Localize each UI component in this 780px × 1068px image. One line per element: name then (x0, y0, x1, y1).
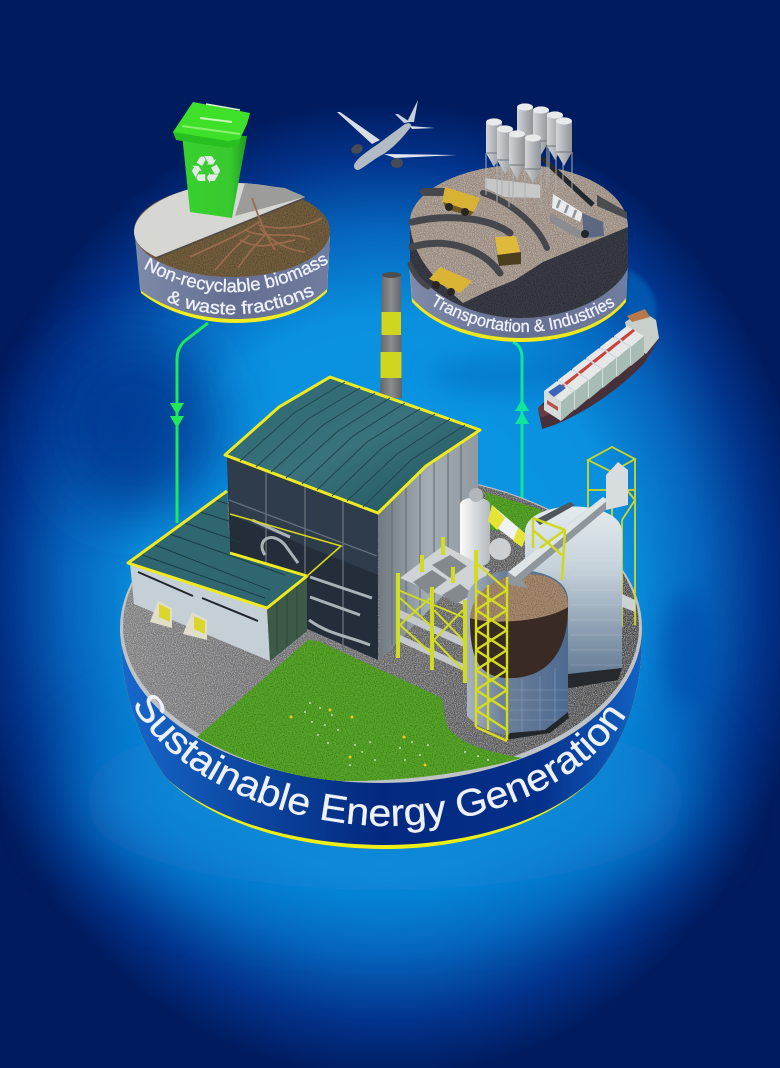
front tower scaffold (476, 550, 507, 741)
main roof (225, 377, 480, 513)
disc top rim (120, 473, 642, 783)
band glow (121, 640, 642, 849)
low building front wall (130, 563, 270, 661)
deck platforms (400, 545, 490, 606)
white stack tank (460, 498, 490, 567)
building right wall (378, 431, 478, 660)
icon: dock doors (150, 601, 207, 640)
rock side (410, 222, 628, 318)
disc band (409, 262, 628, 342)
yellow roof guide (230, 514, 341, 576)
lawn back corner (485, 492, 542, 533)
low roof (128, 491, 307, 608)
background shadows and glows (50, 270, 716, 890)
concrete path (134, 183, 305, 257)
rear tower scaffold (588, 447, 635, 627)
rear silo (525, 506, 622, 683)
main building (128, 377, 480, 661)
scaffold (398, 537, 476, 683)
lawn (197, 640, 522, 781)
label: biomass: Non-recyclable biomass (144, 256, 328, 294)
label: sustainable energy generation: Sustainable Energy Generation (136, 694, 626, 833)
icon: container ship (538, 309, 659, 429)
process equipment (398, 447, 635, 741)
icon: cement silos (485, 103, 627, 219)
icon: recycling bin (173, 102, 250, 218)
yellow flowers (290, 708, 426, 766)
label: biomass (144, 256, 328, 315)
small tank (489, 538, 511, 560)
icon: dump trucks (429, 187, 521, 296)
front silo (467, 570, 568, 736)
conveyor (506, 497, 614, 588)
quarry terraces (410, 192, 547, 287)
panel: biomass disc (134, 102, 330, 323)
roof yellow outline (128, 491, 307, 608)
roots (190, 198, 322, 270)
icon: airplane (337, 100, 457, 170)
panel: main disc (120, 484, 642, 849)
white flowers (304, 702, 489, 766)
low building side wall (267, 576, 307, 661)
quarry top (410, 165, 628, 303)
label: biomass: & waste fractions (167, 286, 314, 315)
glass facade (227, 456, 378, 660)
wall vents (138, 572, 258, 621)
disc top mulch (134, 185, 330, 277)
chimney (380, 272, 402, 398)
arrow: biomass to plant (170, 323, 208, 523)
disc base (135, 236, 330, 323)
label: transportation: Transportation & Industries (434, 294, 614, 332)
panel: transportation disc (408, 103, 628, 342)
arrow: plant to transportation (513, 342, 529, 502)
gravel surface (123, 474, 639, 778)
icon: concrete mixer (550, 194, 604, 238)
icon: recycling symbol: ♻ (189, 148, 223, 192)
diagonal duct (488, 505, 527, 547)
